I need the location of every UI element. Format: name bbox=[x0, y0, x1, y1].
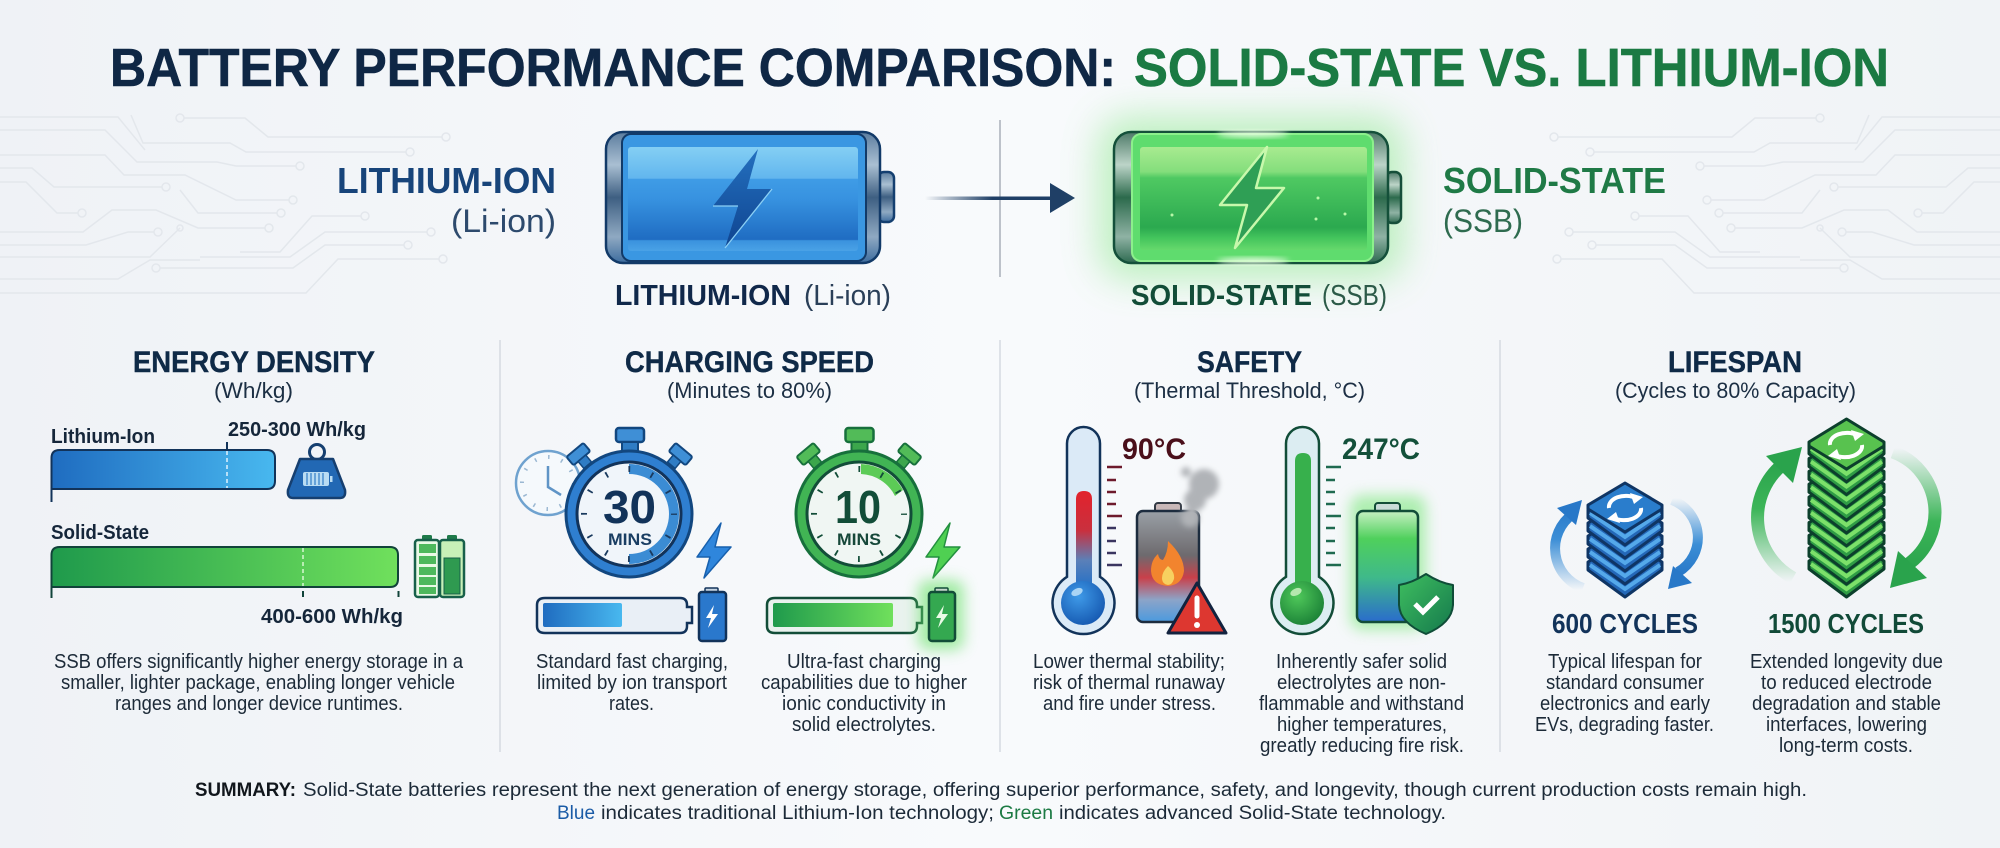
panel: lifespan bbox=[1535, 346, 1943, 757]
summary: Blue bbox=[557, 803, 595, 824]
lithium-ion side label: (Li-ion) bbox=[451, 203, 556, 239]
text: solid-state lifespan description: to reduced electrode bbox=[1761, 672, 1932, 694]
solid-state battery caption: (SSB) bbox=[1322, 280, 1387, 312]
text: 1500 cycles: 1500 CYCLES bbox=[1768, 608, 1924, 639]
text: solid-state safety description: flammable and withstand bbox=[1259, 693, 1464, 715]
text: solid-state charging description: capabilities due to higher bbox=[761, 672, 967, 694]
solid-state energy bar: Solid-State bbox=[51, 522, 149, 544]
text: lithium-ion lifespan description: electronics and early bbox=[1540, 693, 1710, 715]
icon: battery weight bbox=[288, 444, 345, 498]
icon: 30 minute stopwatch bbox=[566, 428, 693, 577]
heading: charging speed bbox=[625, 346, 874, 403]
text: solid-state lifespan description: Extended longevity due bbox=[1750, 651, 1943, 673]
icon: green bolt bbox=[926, 523, 960, 578]
text: solid-state charging description: Ultra-fast charging bbox=[787, 651, 941, 673]
heading: energy density: (Wh/kg) bbox=[214, 378, 293, 403]
icon: 30 minute stopwatch: 30 bbox=[603, 481, 656, 533]
heading: lifespan bbox=[1615, 346, 1856, 403]
text: energy density description: ranges and longer device runtimes. bbox=[115, 693, 403, 715]
icon: green 1500 cycle stack bbox=[1758, 419, 1935, 597]
text: lithium-ion lifespan description: Typical lifespan for bbox=[1548, 651, 1702, 673]
text: lithium-ion charging description bbox=[536, 651, 728, 715]
icon: lithium-ion battery bbox=[606, 132, 894, 263]
icon: thermometer 90C bbox=[1053, 427, 1186, 634]
text: solid-state lifespan description: long-term costs. bbox=[1779, 735, 1913, 757]
icon: blue bolt bbox=[697, 523, 731, 578]
icon: blue 600 cycle stack bbox=[1555, 483, 1698, 597]
icon: thermometer 247C: 247°C bbox=[1342, 433, 1420, 466]
icon: 10 minute stopwatch: 10 bbox=[835, 481, 881, 533]
text: energy density description bbox=[54, 651, 464, 715]
solid-state side label: SOLID-STATE bbox=[1443, 160, 1666, 201]
text: solid-state safety description: greatly reducing fire risk. bbox=[1260, 735, 1464, 757]
icon: stacked green batteries bbox=[415, 535, 464, 597]
text: energy density description: smaller, lighter package, enabling longer vehicle bbox=[61, 672, 455, 694]
icon: wall clock bbox=[516, 451, 580, 515]
lithium-ion energy bar bbox=[51, 419, 366, 502]
icon: small green battery bbox=[918, 580, 964, 650]
summary: Green bbox=[999, 803, 1053, 824]
text: energy density description: SSB offers significantly higher energy storage in a bbox=[54, 651, 464, 673]
heading: lifespan: LIFESPAN bbox=[1668, 346, 1802, 379]
title bbox=[110, 38, 1889, 98]
icon: check shield bbox=[1399, 574, 1453, 634]
icon: thermometer 90C: 90°C bbox=[1122, 433, 1186, 466]
blue charge bar bbox=[537, 598, 692, 633]
summary: Solid-State batteries represent the next generation of energy storage, offering superior performance, safety, and longevity, though current production costs remain high. bbox=[303, 780, 1807, 801]
green charge bar bbox=[767, 598, 922, 633]
text: lithium-ion charging description: limited by ion transport bbox=[537, 672, 727, 694]
lithium-ion energy bar: 250-300 Wh/kg bbox=[228, 419, 366, 441]
text: 600 cycles: 600 CYCLES bbox=[1552, 608, 1698, 639]
lithium-ion side label bbox=[337, 160, 556, 239]
icon: small blue battery bbox=[699, 588, 726, 641]
solid-state battery caption: SOLID-STATE bbox=[1131, 280, 1312, 312]
heading: safety bbox=[1134, 346, 1365, 403]
icon: 30 minute stopwatch: MINS bbox=[608, 530, 652, 549]
text: lithium-ion charging description: Standard fast charging, bbox=[536, 651, 728, 673]
heading: lifespan: (Cycles to 80% Capacity) bbox=[1615, 378, 1856, 403]
text: lithium-ion lifespan description: EVs, degrading faster. bbox=[1535, 714, 1714, 736]
icon: safe green battery bbox=[1350, 495, 1426, 630]
text: solid-state charging description bbox=[761, 651, 967, 736]
icon: 10 minute stopwatch: MINS bbox=[837, 530, 881, 549]
heading: charging speed: (Minutes to 80%) bbox=[667, 378, 832, 403]
text: lithium-ion charging description: rates. bbox=[609, 693, 654, 715]
icon: thermometer 247C bbox=[1272, 427, 1420, 634]
text: solid-state charging description: ionic conductivity in bbox=[782, 693, 946, 715]
solid-state side label bbox=[1443, 160, 1666, 239]
summary bbox=[195, 780, 1807, 824]
heading: safety: SAFETY bbox=[1197, 346, 1302, 379]
panel: safety bbox=[1033, 346, 1464, 757]
summary: SUMMARY: bbox=[195, 780, 296, 801]
title: BATTERY PERFORMANCE COMPARISON: bbox=[110, 38, 1116, 98]
lithium-ion battery caption: (Li-ion) bbox=[804, 280, 891, 312]
text: solid-state lifespan description: interfaces, lowering bbox=[1766, 714, 1927, 736]
text: lithium-ion safety description: risk of thermal runaway bbox=[1033, 672, 1225, 694]
title: SOLID-STATE VS. LITHIUM-ION bbox=[1134, 38, 1889, 98]
icon: warning triangle bbox=[1168, 583, 1226, 633]
lithium-ion side label: LITHIUM-ION bbox=[337, 160, 556, 201]
text: lithium-ion lifespan description bbox=[1535, 651, 1714, 736]
heading: energy density bbox=[133, 346, 375, 403]
lithium-ion battery caption: LITHIUM-ION bbox=[615, 280, 791, 312]
solid-state side label: (SSB) bbox=[1443, 203, 1523, 239]
icon: burning battery bbox=[1137, 467, 1219, 622]
text: solid-state safety description: Inherently safer solid bbox=[1276, 651, 1447, 673]
heading: charging speed: CHARGING SPEED bbox=[625, 346, 874, 379]
heading: energy density: ENERGY DENSITY bbox=[133, 346, 375, 379]
panel: energy density bbox=[51, 346, 464, 715]
solid-state energy bar bbox=[51, 522, 403, 628]
text: lithium-ion safety description: and fire under stress. bbox=[1043, 693, 1216, 715]
text: lithium-ion safety description: Lower thermal stability; bbox=[1033, 651, 1225, 673]
icon: solid-state battery bbox=[1098, 116, 1404, 280]
text: lithium-ion lifespan description: standard consumer bbox=[1546, 672, 1704, 694]
solid-state energy bar: 400-600 Wh/kg bbox=[261, 606, 403, 628]
lithium-ion energy bar: Lithium-Ion bbox=[51, 426, 155, 448]
text: solid-state charging description: solid electrolytes. bbox=[792, 714, 936, 736]
text: solid-state lifespan description bbox=[1750, 651, 1943, 757]
heading: safety: (Thermal Threshold, °C) bbox=[1134, 378, 1365, 403]
summary: indicates traditional Lithium-Ion technology; bbox=[601, 803, 994, 824]
lithium-ion battery caption bbox=[615, 280, 891, 312]
text: solid-state safety description: higher temperatures, bbox=[1277, 714, 1447, 736]
summary: indicates advanced Solid-State technology. bbox=[1059, 803, 1446, 824]
section dividers bbox=[500, 340, 1500, 752]
text: solid-state lifespan description: degradation and stable bbox=[1752, 693, 1941, 715]
text: lithium-ion safety description bbox=[1033, 651, 1225, 715]
icon: 10 minute stopwatch bbox=[796, 428, 922, 577]
text: solid-state safety description bbox=[1259, 651, 1464, 757]
text: solid-state safety description: electrolytes are non- bbox=[1277, 672, 1446, 694]
arrow bbox=[925, 183, 1075, 213]
panel: charging speed bbox=[516, 346, 967, 736]
